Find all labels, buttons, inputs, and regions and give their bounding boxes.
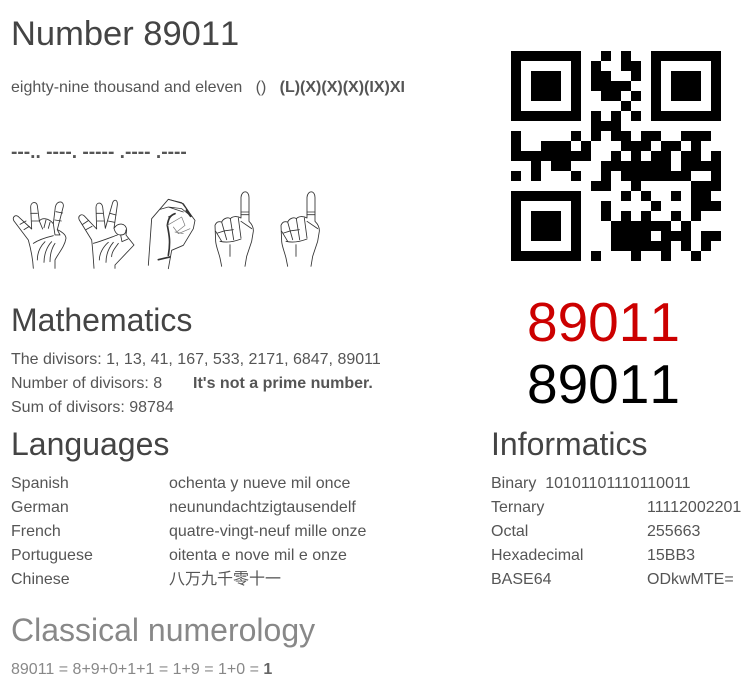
languages table: ochenta y nueve mil once <box>169 475 350 492</box>
informatics table: 11112002201 <box>647 499 741 516</box>
hand sign 0 <box>148 199 195 269</box>
informatics table: Binary 10101101110110011 <box>491 475 691 492</box>
informatics table: 15BB3 <box>647 547 695 564</box>
hand sign 8 <box>13 202 66 268</box>
languages table: Spanish <box>11 475 69 492</box>
heading: languages: Languages <box>11 426 169 462</box>
informatics table <box>491 475 741 588</box>
languages table: Portuguese <box>11 547 93 564</box>
informatics table: 255663 <box>647 523 700 540</box>
languages table <box>11 475 366 588</box>
red number: 89011 <box>527 291 680 353</box>
heading: mathematics: Mathematics <box>11 302 192 338</box>
divisors list: The divisors: 1, 13, 41, 167, 533, 2171, 6847, 89011 <box>11 351 381 368</box>
number in words and roman numeral: eighty-nine thousand and eleven () (L)(X)(X)(X)(IX)XI <box>11 79 405 96</box>
hand sign 9 <box>79 200 134 268</box>
prime note: It's not a prime number. <box>193 375 373 392</box>
heading: classical numerology: Classical numerology <box>11 612 315 648</box>
languages table: neunundachtzigtausendelf <box>169 499 356 516</box>
languages table: quatre-vingt-neuf mille onze <box>169 523 366 540</box>
informatics table: Octal <box>491 523 528 540</box>
black number: 89011 <box>527 353 680 415</box>
hand sign 1 <box>215 192 253 266</box>
number of divisors: Number of divisors: 8 <box>11 375 162 392</box>
informatics table: Ternary <box>491 499 544 516</box>
informatics table: BASE64 <box>491 571 551 588</box>
heading: informatics: Informatics <box>491 426 647 462</box>
languages table: 八万九千零十一 <box>169 571 281 588</box>
sum of divisors: Sum of divisors: 98784 <box>11 399 174 416</box>
QR code <box>511 51 721 261</box>
languages table: Chinese <box>11 571 70 588</box>
languages table: oitenta e nove mil e onze <box>169 547 347 564</box>
title: Number 89011 <box>11 15 239 53</box>
morse code: ---.. ----. ----- .---- .---- <box>11 142 187 163</box>
sign language hands <box>12 191 320 270</box>
informatics table: Hexadecimal <box>491 547 583 564</box>
languages table: German <box>11 499 69 516</box>
hand sign 1 <box>281 192 319 266</box>
languages table: French <box>11 523 61 540</box>
numerology sum: 89011 = 8+9+0+1+1 = 1+9 = 1+0 = 1 <box>11 661 272 678</box>
informatics table: ODkwMTE= <box>647 571 734 588</box>
